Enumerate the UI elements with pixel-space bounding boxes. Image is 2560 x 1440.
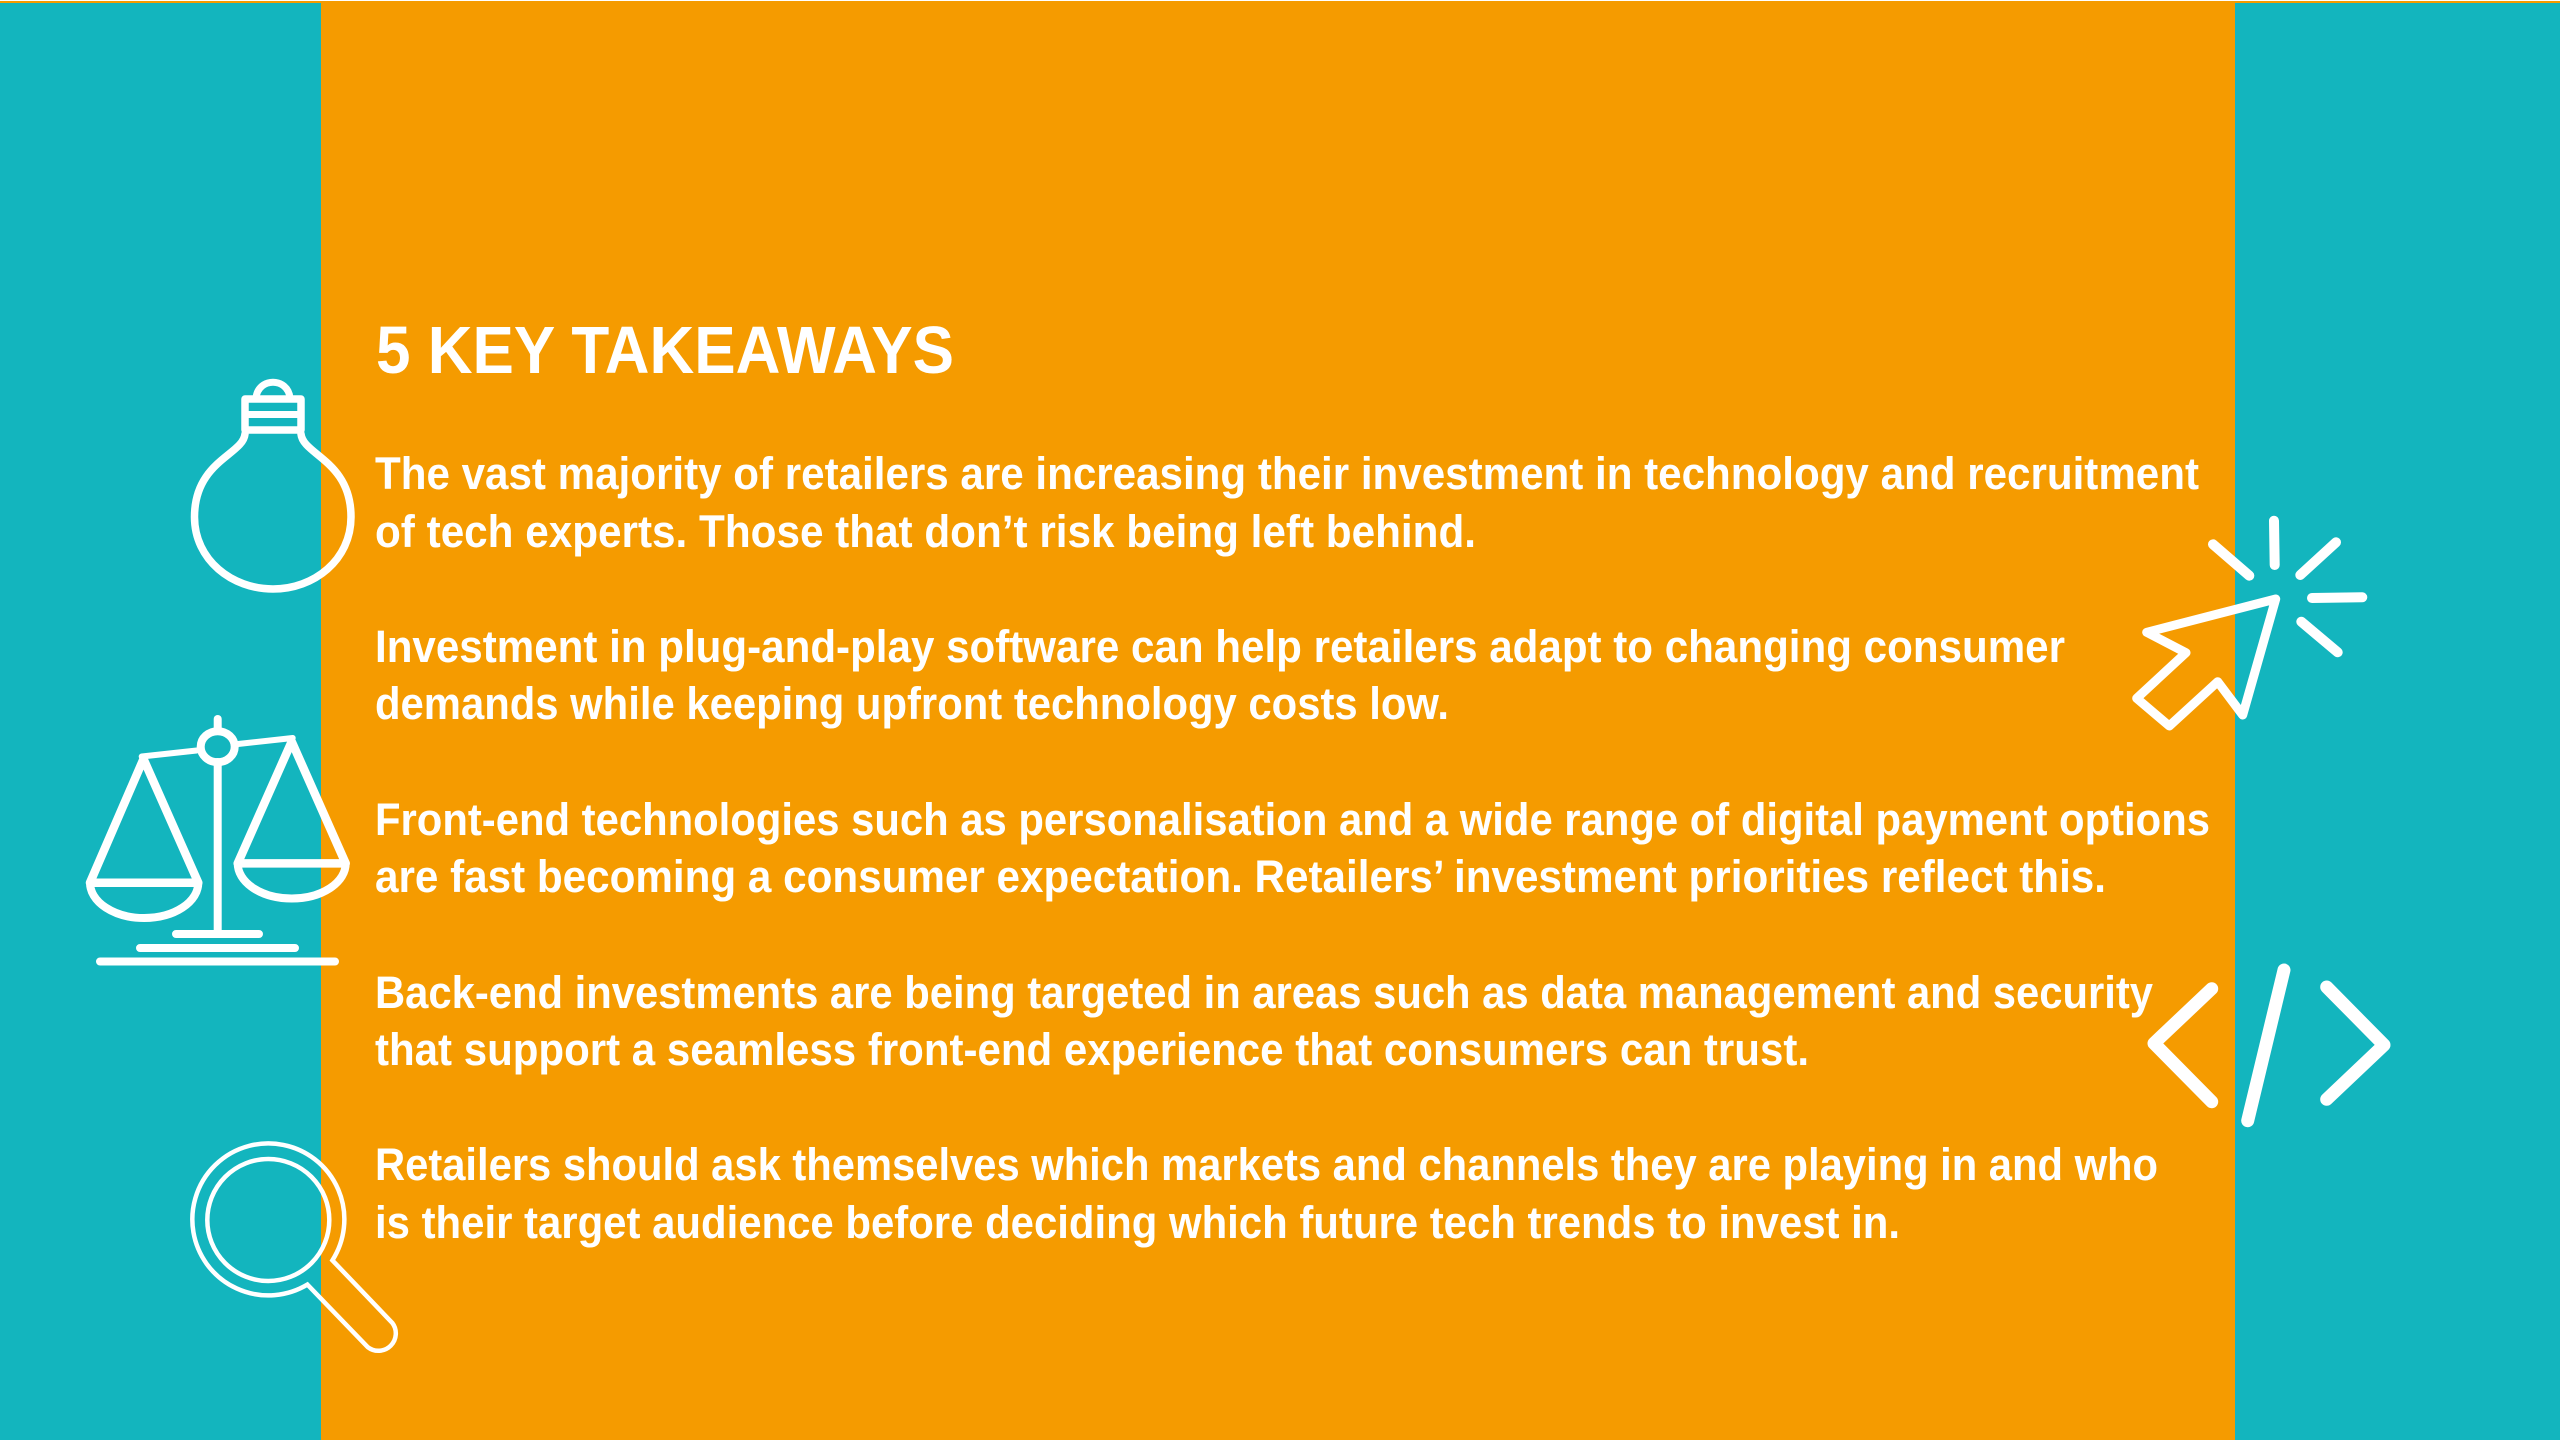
takeaway 2 text: Investment in plug-and-play software can help retailers adapt to changing consumer	[375, 621, 2065, 672]
icon: magnifying glass	[192, 1143, 396, 1351]
takeaway 2 text: demands while keeping upfront technology costs low.	[375, 678, 1449, 729]
panel: left teal band	[0, 3, 321, 1440]
icon: mouse cursor click	[2137, 521, 2362, 726]
takeaway 1 text: The vast majority of retailers are increasing their investment in technology and recruitment	[375, 448, 2199, 499]
panel: right teal band	[2235, 3, 2560, 1440]
takeaway 4 text: that support a seamless front-end experience that consumers can trust.	[375, 1024, 1809, 1075]
takeaway 5 text: is their target audience before deciding which future tech trends to invest in.	[375, 1197, 1900, 1248]
takeaway 4 text	[375, 967, 2153, 1075]
icon: balance scales	[90, 719, 346, 962]
icon: code brackets	[2154, 970, 2384, 1121]
takeaway 3 text: are fast becoming a consumer expectation. Retailers’ investment priorities reflect this.	[375, 851, 2106, 902]
takeaway 3 text: Front-end technologies such as personalisation and a wide range of digital payment options	[375, 794, 2210, 845]
takeaway 1 text: of tech experts. Those that don’t risk being left behind.	[375, 506, 1476, 557]
takeaway 5 text	[375, 1139, 2158, 1248]
takeaway 5 text: Retailers should ask themselves which markets and channels they are playing in and who	[375, 1139, 2158, 1190]
takeaway 2 text	[375, 621, 2065, 729]
takeaway 1 text	[375, 448, 2199, 557]
takeaway 4 text: Back-end investments are being targeted in areas such as data management and security	[375, 967, 2153, 1018]
icon: light bulb	[194, 382, 351, 589]
takeaway 3 text	[375, 794, 2210, 902]
heading: 5 KEY TAKEAWAYS	[376, 313, 954, 388]
